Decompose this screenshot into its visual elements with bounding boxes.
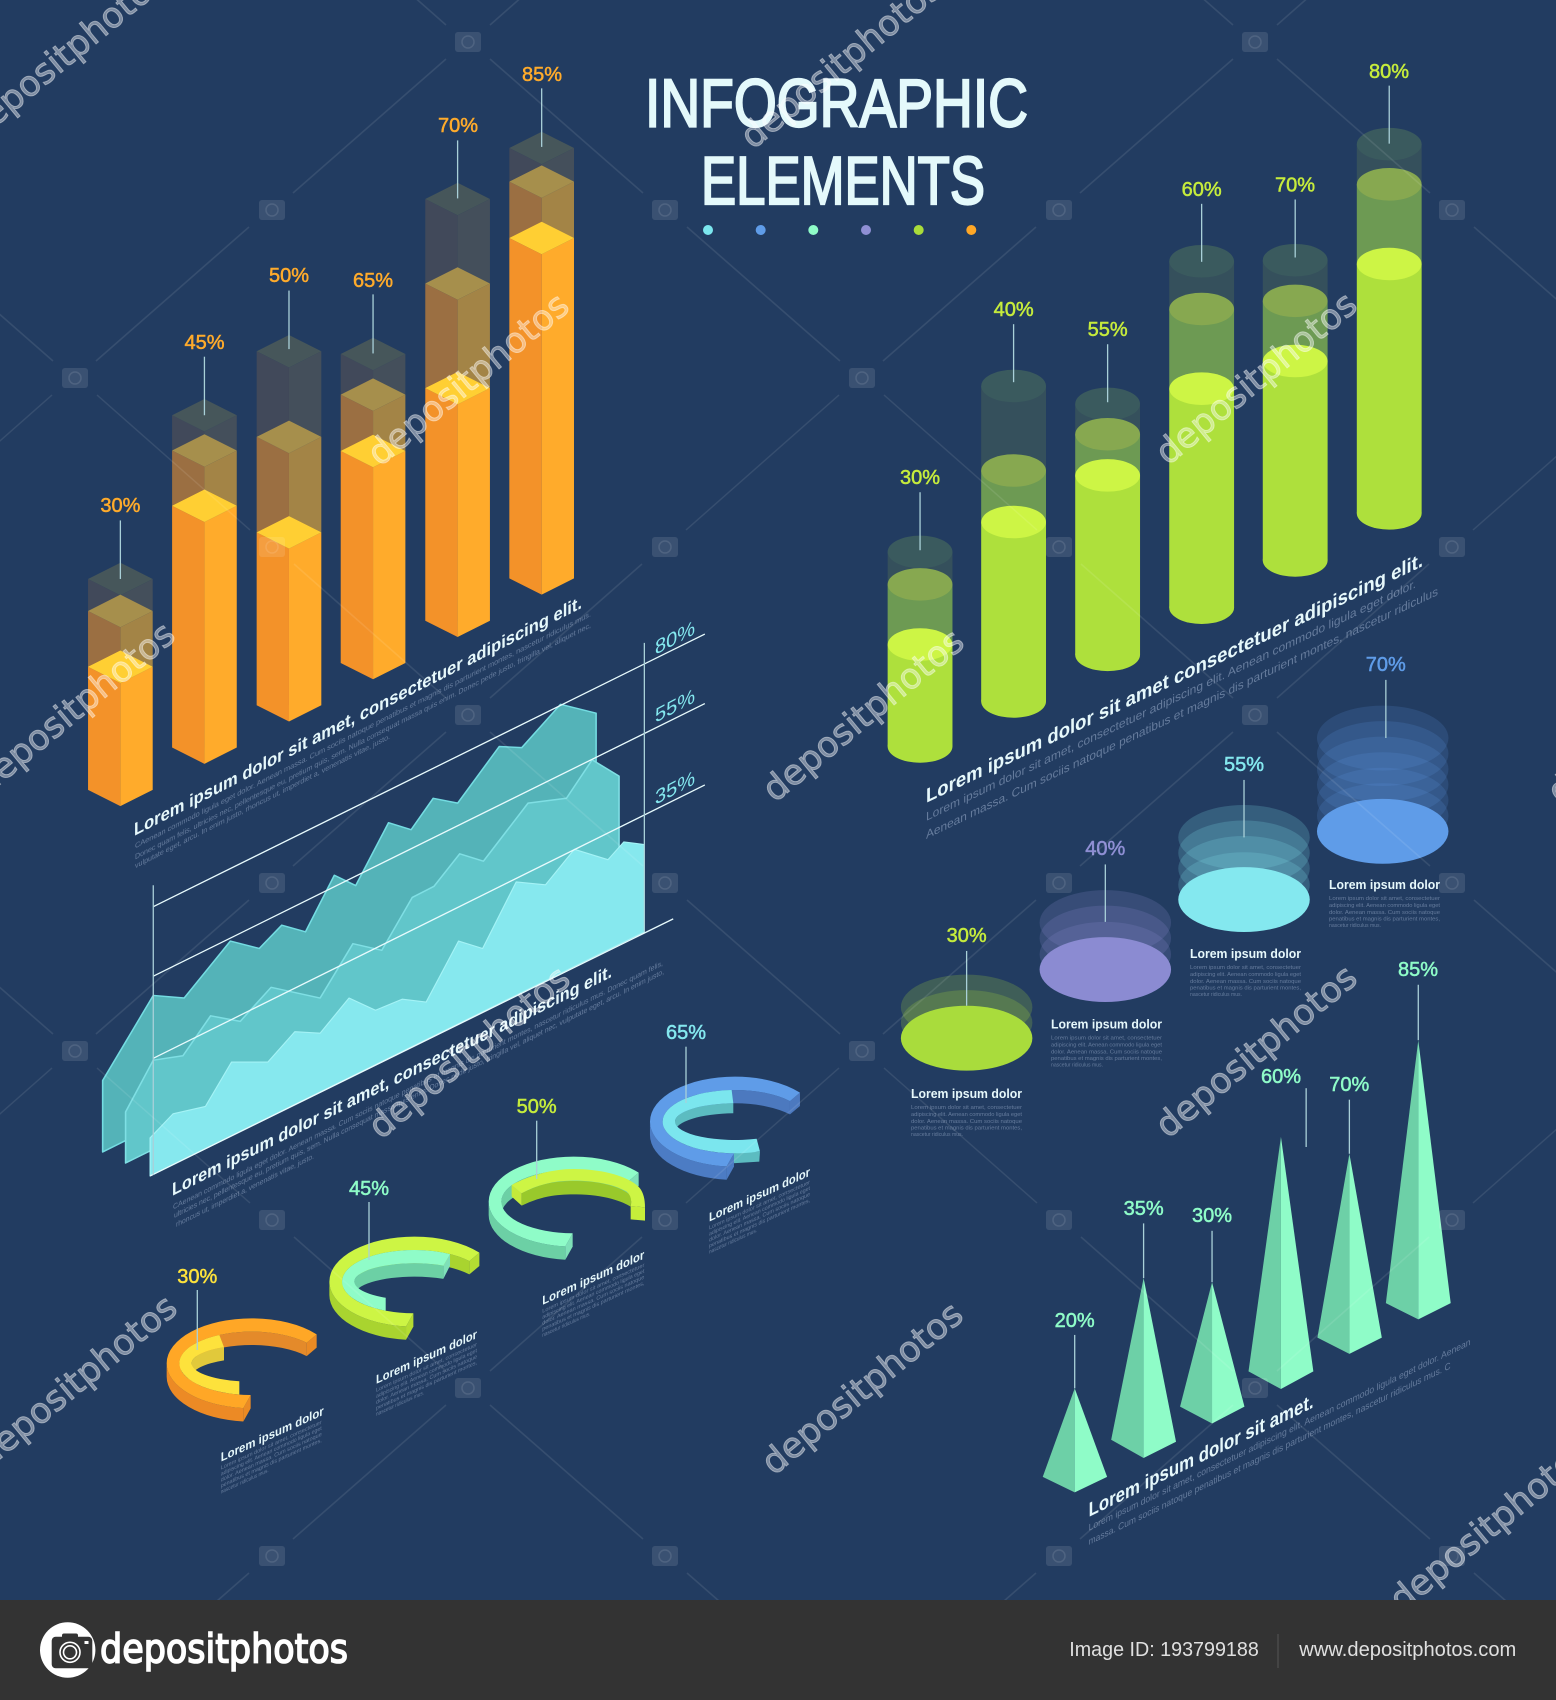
- ring 50%: [489, 1157, 645, 1260]
- disc caption 40%: dolor. Aenean massa. Cum sociis natoque: [1051, 1050, 1162, 1056]
- ring caption 50%: dolor. Aenean massa. Cum sociis natoque: [542, 1275, 644, 1327]
- pyramid 30%: [1180, 1231, 1244, 1423]
- watermarks: depositphotos: [755, 621, 972, 810]
- ring caption 45%: dolor. Aenean massa. Cum sociis natoque: [376, 1354, 477, 1406]
- ring caption 50%: penatibus et magnis dis parturient montes,: [542, 1281, 645, 1333]
- ring value 30%: 30%: [177, 1266, 218, 1288]
- pyramid 85%: [1386, 985, 1451, 1319]
- orange bar 50%: [257, 291, 321, 722]
- axis label 80%: 80%: [655, 616, 695, 660]
- pyramid chart caption: Lorem ipsum dolor sit amet.: [1089, 1390, 1314, 1522]
- pyramid value labels: [1055, 959, 1438, 1332]
- orange bar 30%: [88, 520, 153, 806]
- pyramid 35%: [1111, 1223, 1176, 1458]
- orange value labels: [100, 64, 562, 517]
- green value labels: 30%: [900, 467, 940, 489]
- footer website: www.depositphotos.com: [1298, 1639, 1516, 1661]
- title colour dots: [703, 225, 976, 235]
- ring value 50%: 50%: [517, 1096, 557, 1118]
- disc caption 70%: adipiscing elit. Aenean commodo ligula eget: [1329, 903, 1440, 909]
- axis label 55%: 55%: [655, 684, 695, 728]
- ring caption 50%: Lorem ipsum dolor sit amet, consectetuer: [542, 1263, 644, 1315]
- ring caption 65%: penatibus et magnis dis parturient montes,: [709, 1198, 810, 1250]
- ring caption 45%: penatibus et magnis dis parturient montes,: [376, 1360, 477, 1412]
- disc caption 30%: Lorem ipsum dolor: [911, 1087, 1022, 1101]
- disc caption 40%: adipiscing elit. Aenean commodo ligula eget: [1051, 1042, 1162, 1048]
- disc 30%: [901, 951, 1032, 1071]
- pyramid value labels: 20%: [1055, 1310, 1095, 1332]
- panel: ring charts: [167, 1022, 810, 1496]
- green chart caption: Lorem ipsum dolor sit amet, consectetuer adipiscing elit. Aenean commodo ligula eget dolor.: [926, 577, 1416, 824]
- pyramid value labels: 60%: [1261, 1066, 1301, 1088]
- ring caption 45%: nascetur ridiculus mus.: [376, 1390, 424, 1418]
- orange bar 45%: [172, 357, 237, 764]
- ring leader lines: [197, 1047, 686, 1350]
- disc caption 55%: nascetur ridiculus mus.: [1190, 992, 1242, 998]
- watermarks: depositphotos: [361, 958, 578, 1147]
- disc caption 70%: dolor. Aenean massa. Cum sociis natoque: [1329, 910, 1440, 916]
- orange value labels: 65%: [353, 270, 393, 292]
- pyramid chart caption: massa. Cum sociis natoque penatibus et magnis dis parturient montes, nascetur ridiculus mus. C: [1089, 1361, 1451, 1548]
- title: [645, 66, 1028, 219]
- orange value labels: 30%: [100, 495, 141, 517]
- green value labels: 55%: [1088, 319, 1128, 341]
- disc caption 30%: penatibus et magnis dis parturient montes,: [911, 1126, 1022, 1132]
- disc caption 70%: [1329, 878, 1440, 929]
- ring caption 65%: [709, 1164, 810, 1256]
- orange value labels: 85%: [522, 64, 562, 86]
- ring value 45%: 45%: [349, 1178, 389, 1200]
- green chart caption: Lorem ipsum dolor sit amet consectetuer adipiscing elit.: [926, 549, 1423, 808]
- pyramid 70%: [1317, 1100, 1382, 1354]
- disc value 55%: 55%: [1224, 754, 1264, 776]
- ring 65%: [650, 1077, 800, 1180]
- footer bar: [0, 1600, 1556, 1700]
- title: ELEMENTS: [701, 143, 985, 219]
- orange chart caption: Lorem ipsum dolor sit amet, consectetuer adipiscing elit.: [134, 593, 582, 841]
- area chart caption: ultricies nec, pellentesque eu, pretium quis, sem. Nulla consequat massa quis enim. Donec pede justo, fringilla vel, aliquet nec, vulputate eget, arcu. In enim justo,: [174, 967, 664, 1220]
- area chart caption: CAenean commodo ligula eget dolor. Aenean massa. Cum sociis natoque penatibus et magnis dis parturient montes, nascetur ridiculus mus. Donec quam felis,: [173, 959, 663, 1211]
- ring caption 45%: [376, 1326, 477, 1418]
- disc caption 55%: adipiscing elit. Aenean commodo ligula eget: [1190, 972, 1301, 978]
- disc caption 55%: Lorem ipsum dolor sit amet, consectetuer: [1190, 965, 1301, 971]
- chart grid lines: [150, 634, 705, 1176]
- pyramid chart caption: Lorem ipsum dolor sit amet, consectetuer adipiscing elit. Aenean commodo ligula eget dolor. Aenean: [1089, 1337, 1471, 1534]
- pyramid 60%: [1249, 1088, 1313, 1389]
- disc caption 70%: Lorem ipsum dolor: [1329, 878, 1440, 892]
- disc caption 55%: [1190, 947, 1301, 998]
- title: INFOGRAPHIC: [645, 66, 1028, 142]
- green cylinder 55%: [1075, 344, 1140, 671]
- green cylinder 40%: [981, 324, 1046, 718]
- ring caption 45%: Lorem ipsum dolor sit amet, consectetuer: [376, 1342, 477, 1394]
- ring caption 65%: adipiscing elit. Aenean commodo ligula eget: [709, 1186, 810, 1238]
- ring caption 45%: adipiscing elit. Aenean commodo ligula eget: [376, 1348, 477, 1400]
- ring caption 65%: dolor. Aenean massa. Cum sociis natoque: [709, 1192, 810, 1244]
- panel: teal isometric area chart: [103, 616, 705, 1231]
- orange bar 70%: [425, 140, 490, 637]
- front area layer: [150, 842, 644, 1176]
- footer logo icon: [40, 1622, 95, 1678]
- orange value labels: 70%: [438, 115, 478, 137]
- watermarks: depositphotos: [754, 1294, 971, 1483]
- disc value 70%: 70%: [1366, 654, 1406, 676]
- green chart caption: Aenean massa. Cum sociis natoque penatibus et magnis dis parturient montes, nascetur ridiculus: [926, 584, 1438, 842]
- disc caption 40%: penatibus et magnis dis parturient montes,: [1051, 1056, 1162, 1062]
- disc caption 30%: nascetur ridiculus mus.: [911, 1132, 963, 1138]
- ring caption 30%: Lorem ipsum dolor: [221, 1403, 324, 1465]
- ring value 65%: 65%: [666, 1022, 706, 1044]
- disc caption 70%: penatibus et magnis dis parturient montes,: [1329, 916, 1440, 922]
- green value labels: [900, 61, 1409, 489]
- ring 30%: [167, 1318, 317, 1421]
- pyramid value labels: 30%: [1192, 1205, 1232, 1227]
- green value labels: 70%: [1275, 174, 1315, 196]
- watermarks: depositphotos: [1148, 284, 1365, 473]
- footer image id: Image ID: 193799188: [1069, 1639, 1259, 1661]
- orange chart caption: Donec quam felis, ultricies nec, pellentesque eu, pretium quis, sem. Nulla consequat massa quis enim. Donec pede justo, fringilla vel, aliquet nec,: [135, 621, 591, 861]
- disc caption 40%: [1051, 1018, 1162, 1068]
- orange value labels: 50%: [269, 265, 309, 287]
- ring caption 50%: Lorem ipsum dolor: [542, 1247, 644, 1308]
- ring caption 65%: nascetur ridiculus mus.: [709, 1228, 757, 1256]
- area chart layers: [103, 634, 705, 1176]
- green value labels: 60%: [1182, 179, 1222, 201]
- disc value 40%: 40%: [1085, 838, 1126, 860]
- ring caption 50%: nascetur ridiculus mus.: [542, 1311, 591, 1339]
- orange bar 65%: [341, 294, 405, 679]
- footer logo wordmark: depositphotos: [100, 1627, 348, 1673]
- disc caption 30%: Lorem ipsum dolor sit amet, consectetuer: [911, 1105, 1022, 1111]
- green value labels: 40%: [994, 299, 1034, 321]
- disc caption 40%: nascetur ridiculus mus.: [1051, 1062, 1103, 1068]
- pyramid 20%: [1043, 1335, 1107, 1492]
- axis label 35%: 35%: [655, 766, 695, 810]
- ring caption 30%: Lorem ipsum dolor sit amet, consectetuer: [221, 1420, 322, 1472]
- disc value 30%: 30%: [947, 925, 987, 947]
- orange chart caption: vulputate eget, arcu. In enim justo, rhoncus ut, imperdiet a, venenatis vitae, justo.: [135, 732, 390, 870]
- green value labels: 80%: [1369, 61, 1409, 83]
- orange value labels: 45%: [184, 332, 225, 354]
- green cylinder 70%: [1263, 199, 1328, 577]
- disc caption 30%: adipiscing elit. Aenean commodo ligula eget: [911, 1112, 1022, 1118]
- ring caption 65%: Lorem ipsum dolor: [709, 1164, 810, 1225]
- green cylinder 30%: [888, 492, 952, 763]
- disc 55%: [1178, 780, 1310, 932]
- disc caption 70%: nascetur ridiculus mus.: [1329, 923, 1381, 929]
- watermarks: depositphotos: [1148, 957, 1365, 1146]
- disc caption 40%: Lorem ipsum dolor: [1051, 1018, 1162, 1032]
- disc 70%: [1317, 680, 1448, 864]
- area chart caption: Lorem ipsum dolor sit amet, consectetuer adipiscing elit.: [172, 962, 612, 1201]
- ring caption 50%: [542, 1247, 645, 1339]
- ring caption 50%: adipiscing elit. Aenean commodo ligula eget: [542, 1269, 645, 1321]
- watermarks: depositphotos: [360, 285, 577, 474]
- ring caption 30%: [221, 1403, 324, 1496]
- ring caption 65%: Lorem ipsum dolor sit amet, consectetuer: [709, 1180, 810, 1232]
- disc caption 70%: Lorem ipsum dolor sit amet, consectetuer: [1329, 896, 1440, 902]
- ring caption 30%: nascetur ridiculus mus.: [221, 1468, 269, 1496]
- green cylinder 80%: [1357, 86, 1422, 530]
- green cylinder 60%: [1169, 204, 1234, 624]
- ring caption 30%: dolor. Aenean massa. Cum sociis natoque: [221, 1432, 322, 1484]
- ring caption 30%: penatibus et magnis dis parturient montes,: [221, 1438, 322, 1490]
- panel: pyramid chart: [1043, 959, 1471, 1548]
- disc caption 55%: dolor. Aenean massa. Cum sociis natoque: [1190, 979, 1301, 985]
- panel: stacked disc charts: [901, 654, 1448, 1138]
- area chart caption: rhoncus ut, imperdiet a, venenatis vitae, justo.: [176, 1152, 314, 1229]
- disc caption 30%: dolor. Aenean massa. Cum sociis natoque: [911, 1119, 1022, 1125]
- middle area layer: [126, 760, 619, 1163]
- orange bar 85%: [509, 88, 574, 595]
- panel: green isometric cylinder chart: [888, 61, 1438, 842]
- disc caption 55%: Lorem ipsum dolor: [1190, 947, 1301, 961]
- disc caption 55%: penatibus et magnis dis parturient montes,: [1190, 986, 1301, 992]
- panel: orange isometric bar chart: [88, 64, 591, 871]
- back area layer: [103, 704, 596, 1152]
- ring 45%: [329, 1237, 479, 1340]
- orange chart caption: CAenean commodo ligula eget dolor. Aenean massa. Cum sociis natoque penatibus et magnis dis parturient montes, nascetur ridiculus mus.: [135, 610, 591, 850]
- pyramid value labels: 70%: [1329, 1074, 1370, 1096]
- pyramid value labels: 85%: [1398, 959, 1438, 981]
- ring caption 30%: adipiscing elit. Aenean commodo ligula eget: [221, 1426, 322, 1478]
- disc caption 40%: Lorem ipsum dolor sit amet, consectetuer: [1051, 1036, 1162, 1042]
- pyramid value labels: 35%: [1124, 1198, 1164, 1220]
- disc caption 30%: [911, 1087, 1022, 1138]
- disc 40%: [1040, 864, 1171, 1002]
- ring caption 45%: Lorem ipsum dolor: [376, 1327, 477, 1387]
